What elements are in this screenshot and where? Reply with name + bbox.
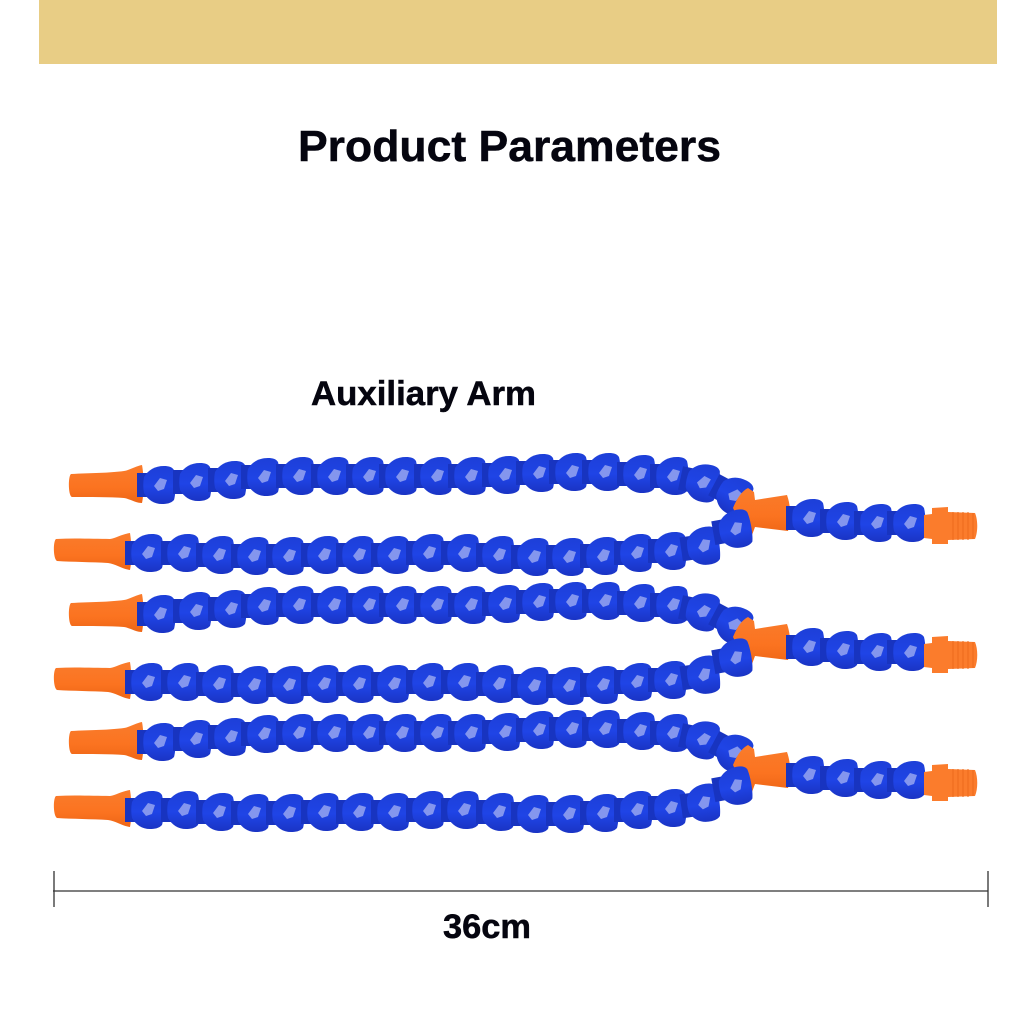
dimension label: 36cm	[443, 908, 531, 946]
hose assembly 3	[54, 710, 977, 833]
hose assembly 2	[54, 582, 977, 705]
hose assembly 1	[54, 453, 977, 576]
title: Product Parameters	[298, 122, 721, 171]
label: auxiliary arm: Auxiliary Arm	[311, 375, 536, 413]
dimension line	[53, 871, 988, 907]
top banner	[39, 0, 997, 64]
